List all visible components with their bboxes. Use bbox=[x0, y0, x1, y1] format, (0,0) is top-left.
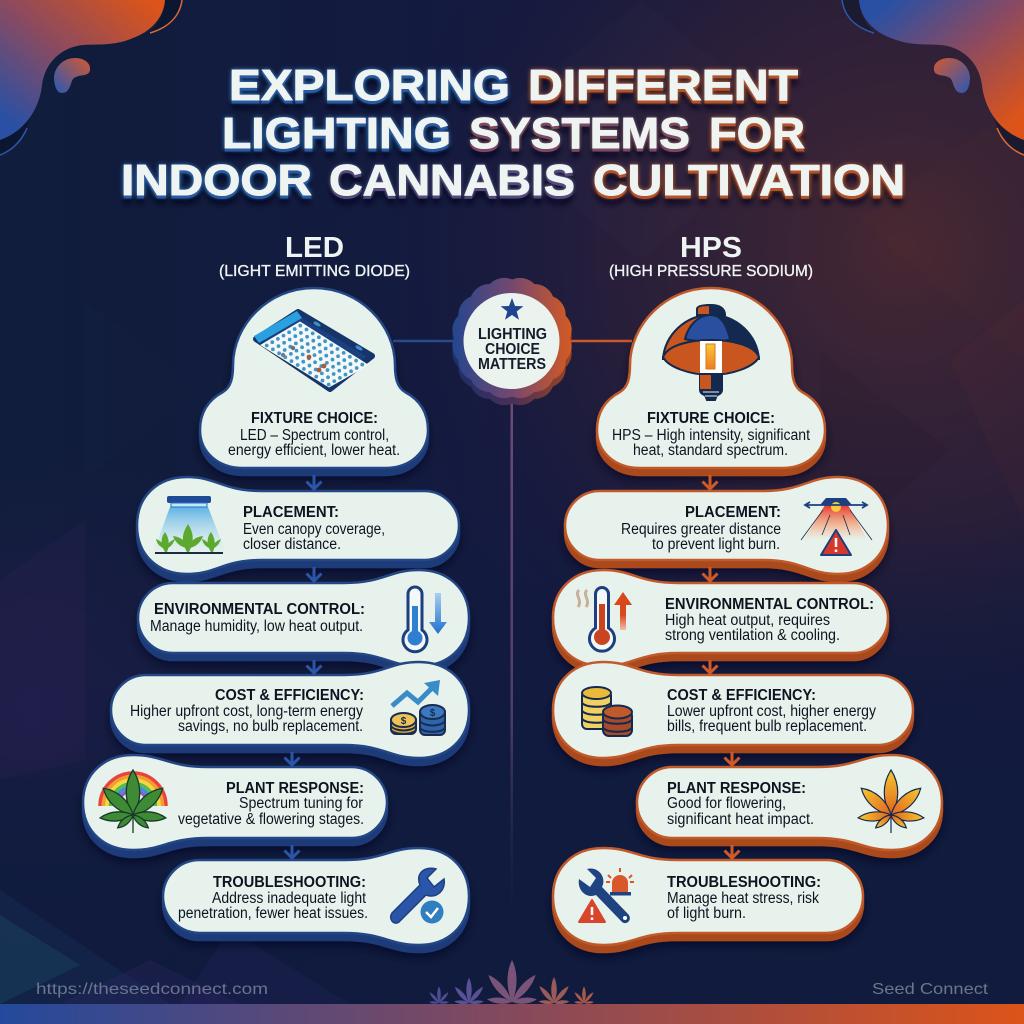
icon: wrench with check bbox=[391, 868, 444, 924]
panel: HPS troubleshooting bbox=[553, 848, 863, 945]
decorative corner blob: top left bbox=[0, 0, 182, 155]
LED column heading bbox=[219, 232, 410, 280]
panel: HPS placement: Requires greater distance bbox=[621, 521, 781, 538]
panel: HPS troubleshooting: TROUBLESHOOTING: bbox=[667, 874, 821, 891]
panel: HPS cost and efficiency: bills, frequent bulb replacement. bbox=[667, 718, 867, 735]
icon: coin stacks bbox=[582, 687, 632, 736]
decorative cannabis leaves at bottom bbox=[428, 960, 595, 1005]
LED column heading: LED bbox=[285, 232, 344, 264]
panel: LED placement: PLACEMENT: bbox=[243, 504, 339, 521]
panel: LED plant response: vegetative & flowering stages. bbox=[178, 811, 364, 828]
panel: HPS cost and efficiency: Lower upfront cost, higher energy bbox=[667, 703, 876, 720]
footer: website url: https://theseedconnect.com bbox=[36, 981, 268, 998]
icon: savings chart and coins: $ bbox=[401, 716, 407, 727]
panel: HPS troubleshooting: of light burn. bbox=[667, 905, 746, 922]
title: LIGHTING bbox=[222, 109, 451, 158]
title: FOR bbox=[709, 109, 805, 158]
panel: LED fixture choice: energy efficient, lower heat. bbox=[228, 442, 400, 459]
panel: LED placement: Even canopy coverage, bbox=[243, 521, 385, 538]
icon: golden cannabis leaf bbox=[857, 770, 925, 833]
icon: HPS lamp bbox=[663, 305, 759, 400]
panel: LED troubleshooting: TROUBLESHOOTING: bbox=[213, 874, 366, 891]
icon: star bbox=[501, 298, 523, 320]
panel: LED troubleshooting bbox=[163, 848, 469, 945]
panel: HPS fixture choice bbox=[597, 288, 825, 468]
panel: HPS plant response: significant heat impact. bbox=[667, 811, 814, 828]
title: INDOOR bbox=[121, 156, 312, 205]
panel: LED fixture choice: FIXTURE CHOICE: bbox=[251, 410, 378, 427]
HPS column heading bbox=[609, 232, 813, 280]
arrows: LED flow bbox=[284, 475, 322, 858]
panel: HPS fixture choice: HPS – High intensity, significant bbox=[612, 427, 811, 444]
title bbox=[121, 61, 905, 205]
panel: LED environmental control: ENVIRONMENTAL CONTROL: bbox=[154, 601, 365, 618]
LED column heading: (LIGHT EMITTING DIODE) bbox=[219, 263, 410, 280]
panel: HPS troubleshooting: Manage heat stress, risk bbox=[667, 890, 819, 907]
badge: lighting choice matters bbox=[452, 278, 572, 405]
icon: grow light over plants bbox=[153, 496, 226, 553]
panel: HPS plant response: PLANT RESPONSE: bbox=[667, 780, 806, 797]
panel: LED cost and efficiency bbox=[111, 662, 469, 758]
panel: LED plant response: PLANT RESPONSE: bbox=[226, 780, 364, 797]
icon: savings chart and coins bbox=[391, 680, 445, 735]
connector: badge to HPS fixture bbox=[570, 340, 632, 342]
icon: distance and burn warning bbox=[801, 498, 872, 555]
panel: HPS environmental control: ENVIRONMENTAL CONTROL: bbox=[665, 596, 874, 613]
icon: wrench, alarm and warning bbox=[579, 868, 634, 923]
panel: LED placement bbox=[137, 477, 459, 574]
arrows: HPS flow bbox=[702, 475, 740, 858]
title: CULTIVATION bbox=[593, 156, 905, 205]
badge: lighting choice matters: MATTERS bbox=[478, 356, 546, 373]
HPS column heading: (HIGH PRESSURE SODIUM) bbox=[609, 263, 813, 280]
panel: LED fixture choice: LED – Spectrum control, bbox=[240, 427, 389, 444]
HPS column heading: HPS bbox=[680, 232, 742, 264]
panel: HPS fixture choice: FIXTURE CHOICE: bbox=[647, 410, 775, 427]
connector: badge to LED fixture bbox=[393, 340, 456, 342]
panel: LED fixture choice bbox=[200, 288, 428, 468]
icon: savings chart and coins: $ bbox=[430, 708, 436, 719]
badge: lighting choice matters: CHOICE bbox=[485, 341, 540, 358]
panel: LED cost and efficiency: Higher upfront cost, long-term energy bbox=[130, 703, 363, 720]
icon: thermometer falling bbox=[403, 587, 447, 652]
centre connector line bbox=[510, 400, 513, 935]
panel: LED troubleshooting: penetration, fewer heat issues. bbox=[178, 905, 368, 922]
panel: LED cost and efficiency: savings, no bulb replacement. bbox=[178, 718, 363, 735]
panel: LED cost and efficiency: COST & EFFICIENCY: bbox=[215, 687, 364, 704]
panel: HPS cost and efficiency: COST & EFFICIENCY: bbox=[667, 687, 816, 704]
panel: HPS placement bbox=[565, 477, 888, 574]
panel: LED environmental control bbox=[138, 570, 469, 666]
decorative corner blob: top right bbox=[842, 0, 1024, 155]
title: CANNABIS bbox=[329, 156, 575, 205]
icon: LED panel bbox=[254, 311, 372, 389]
badge: lighting choice matters: LIGHTING bbox=[478, 326, 547, 343]
panel: LED plant response: Spectrum tuning for bbox=[239, 795, 363, 812]
icon: thermometer rising bbox=[577, 588, 632, 651]
footer: brand name: Seed Connect bbox=[872, 981, 989, 998]
panel: HPS environmental control bbox=[553, 570, 888, 666]
title: EXPLORING bbox=[229, 61, 510, 110]
panel: LED plant response bbox=[83, 755, 387, 850]
panel: HPS plant response: Good for flowering, bbox=[667, 795, 786, 812]
title: DIFFERENT bbox=[528, 61, 798, 110]
panel: HPS environmental control: strong ventilation & cooling. bbox=[665, 627, 840, 644]
panel: HPS cost and efficiency bbox=[553, 662, 913, 758]
icon: rainbow and cannabis leaf bbox=[99, 770, 167, 833]
panel: HPS placement: PLACEMENT: bbox=[685, 504, 781, 521]
bottom gradient bar bbox=[0, 1004, 1024, 1024]
panel: HPS environmental control: High heat output, requires bbox=[665, 612, 830, 629]
panel: LED troubleshooting: Address inadequate light bbox=[212, 890, 367, 907]
panel: HPS placement: to prevent light burn. bbox=[652, 536, 780, 553]
panel: LED placement: closer distance. bbox=[243, 536, 341, 553]
panel: HPS plant response bbox=[637, 755, 942, 850]
panel: LED environmental control: Manage humidity, low heat output. bbox=[150, 618, 363, 635]
title: SYSTEMS bbox=[469, 109, 690, 158]
panel: HPS fixture choice: heat, standard spectrum. bbox=[633, 442, 788, 459]
